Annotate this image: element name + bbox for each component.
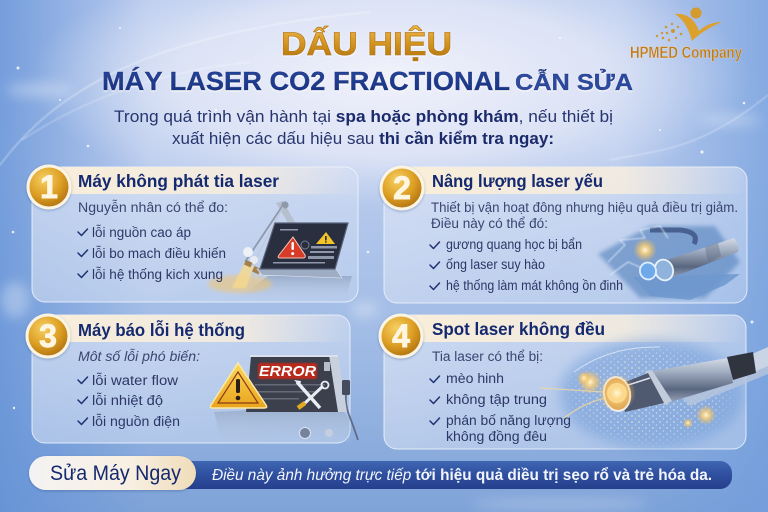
- heading band 4: [402, 315, 746, 342]
- title: Dấu hiệu: DẤU HIỆU: [281, 26, 452, 62]
- intro text: Trong quá trình vận hành tại spa hoặc phòng khám, nếu thiết bị: [114, 107, 613, 126]
- checklist 3: lỗi nhiệt độ: [92, 393, 163, 408]
- intro 3: Môt số lỗi phó biến:: [78, 349, 200, 364]
- icon: error machine with warning: [210, 355, 358, 442]
- checklist 2: [430, 237, 623, 293]
- intro 2: [431, 200, 738, 231]
- badge 2: 2: [393, 170, 411, 206]
- intro 2: Điều này có thể đó:: [431, 216, 548, 231]
- footer button: Sửa Máy Ngay: [50, 462, 181, 485]
- checklist 1: lỗi nguồn cao áp: [92, 225, 191, 240]
- checklist 4: [430, 371, 571, 444]
- badge 4: 4: [392, 318, 410, 354]
- checklist 2: ống laser suy hào: [446, 257, 545, 272]
- heading band 2: [402, 167, 747, 194]
- checklist 1: lỗi hệ thống kich xung: [92, 267, 223, 282]
- checklist 4: không đồng đêu: [446, 429, 547, 444]
- checklist 3: lỗi nguồn điện: [92, 414, 180, 429]
- badge 1: [26, 164, 72, 210]
- intro 1: Nguyễn nhân có thể đo:: [78, 200, 228, 215]
- checklist 2: gương quang học bị bẩn: [446, 237, 582, 252]
- logo: HPMED Company: [630, 8, 742, 62]
- heading 2: Nâng lượng laser yếu: [432, 171, 603, 191]
- panel 3: Máy báo lỗi hệ thống: [26, 314, 358, 443]
- subtitle: Máy laser CO2 Fractional cần sửa: MÁY LASER CO2 FRACTIONAL: [102, 67, 510, 96]
- checklist 4: mèo hinh: [446, 371, 504, 386]
- footer button: [29, 456, 196, 490]
- panel 1: Máy không phát tia laser: [26, 164, 358, 302]
- intro 2: Thiết bị vận hoạt đông nhưng hiệu quả điều trị giảm.: [431, 200, 738, 215]
- badge 1: 1: [40, 169, 58, 205]
- checklist 2: hệ thống làm mát không ồn đinh: [446, 278, 623, 293]
- checklist 4: không tập trung: [446, 392, 547, 407]
- heading 3: Máy báo lỗi hệ thống: [78, 319, 245, 340]
- checklist 4: phán bố năng lượng: [446, 413, 571, 428]
- icon: laser tube on circuit board: [598, 226, 740, 300]
- badge 3: [26, 314, 70, 358]
- badge 4: [378, 314, 424, 358]
- checklist 3: lỗi water flow: [92, 373, 178, 388]
- footer bar: [170, 461, 732, 489]
- icon: error machine with warning: ERROR: [259, 363, 316, 380]
- heading 4: Spot laser không đều: [432, 319, 605, 339]
- heading 1: Máy không phát tia laser: [78, 171, 279, 191]
- checklist 1: lỗi bo mach điều khiến: [92, 246, 226, 261]
- subtitle: Máy laser CO2 Fractional cần sửa: CẪN SỬA: [515, 67, 633, 95]
- intro 4: Tia laser có thể bị:: [432, 349, 543, 364]
- heading band 1: [50, 167, 358, 194]
- icon: laser machine with warning: [208, 201, 352, 298]
- checklist 3: [78, 373, 180, 429]
- icon: laser handpiece with spot: [540, 340, 768, 448]
- footer banner: [29, 456, 732, 490]
- checklist 1: [78, 225, 226, 282]
- badge 2: [380, 166, 424, 210]
- heading band 3: [50, 315, 350, 342]
- intro text: xuất hiện các dấu hiệu sau thi cần kiểm tra ngay:: [172, 129, 554, 148]
- intro text: [114, 107, 613, 148]
- panel 4: Spot laser không đều: [378, 314, 768, 449]
- panel 2: Năng lượng laser yếu: [380, 166, 747, 303]
- footer bar: Điều này ảnh hưởng trực tiếp tới hiệu quả diều trị sẹo rổ và trẻ hóa da.: [212, 466, 712, 484]
- badge 3: 3: [39, 318, 57, 354]
